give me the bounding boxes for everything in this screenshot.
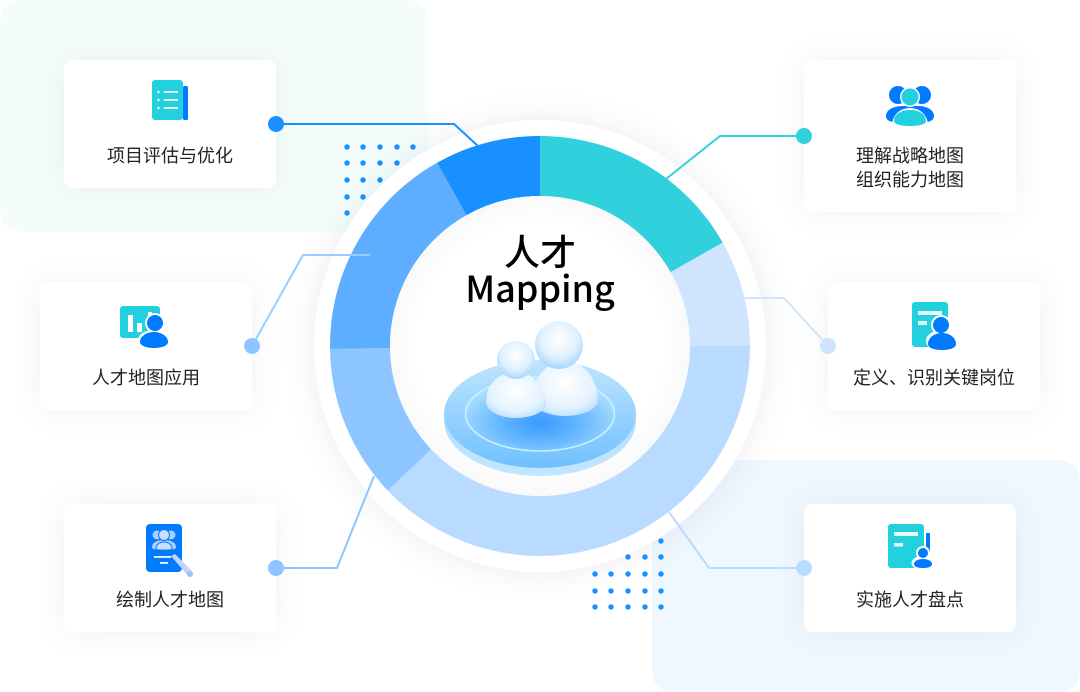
center title: Mapping xyxy=(465,261,615,313)
card: 绘制人才地图 xyxy=(64,504,276,632)
label: 理解战略地图 xyxy=(856,142,964,168)
label: 定义、识别关键岗位 xyxy=(853,364,1015,390)
label: 绘制人才地图 xyxy=(116,586,224,612)
card: 理解战略地图 组织能力地图 xyxy=(804,60,1016,212)
center illustration: people on platform xyxy=(444,321,636,476)
card: 定义、识别关键岗位 xyxy=(828,282,1040,410)
card: 项目评估与优化 xyxy=(64,60,276,188)
label: 项目评估与优化 xyxy=(107,142,233,168)
connector: 项目评估与优化 xyxy=(268,116,478,146)
icon: people group xyxy=(886,86,934,126)
connector: 人才地图应用 xyxy=(244,255,370,354)
label line 2: 组织能力地图 xyxy=(856,166,964,192)
center title: 人才 xyxy=(504,224,576,276)
connector: 实施人才盘点 xyxy=(669,512,812,576)
card: 实施人才盘点 xyxy=(804,504,1016,632)
panel: top-left background xyxy=(0,0,428,232)
connector: 绘制人才地图 xyxy=(268,476,374,576)
dot grid: top-left xyxy=(344,144,416,216)
connector: 理解战略地图 xyxy=(666,128,812,179)
donut chart xyxy=(314,120,766,572)
icon: chart with person xyxy=(120,306,170,350)
icon: book with person xyxy=(888,524,934,570)
icon: list document xyxy=(152,80,188,120)
icon: blue document with pencil xyxy=(146,524,193,577)
connector: 定义、识别关键岗位 xyxy=(745,298,836,354)
card: 人才地图应用 xyxy=(40,282,252,410)
icon: document with person xyxy=(912,302,958,352)
label: 人才地图应用 xyxy=(92,364,200,390)
label: 实施人才盘点 xyxy=(856,586,964,612)
center title xyxy=(465,224,615,313)
dot grid: bottom-right xyxy=(592,538,664,610)
panel: bottom-right background xyxy=(652,460,1080,692)
